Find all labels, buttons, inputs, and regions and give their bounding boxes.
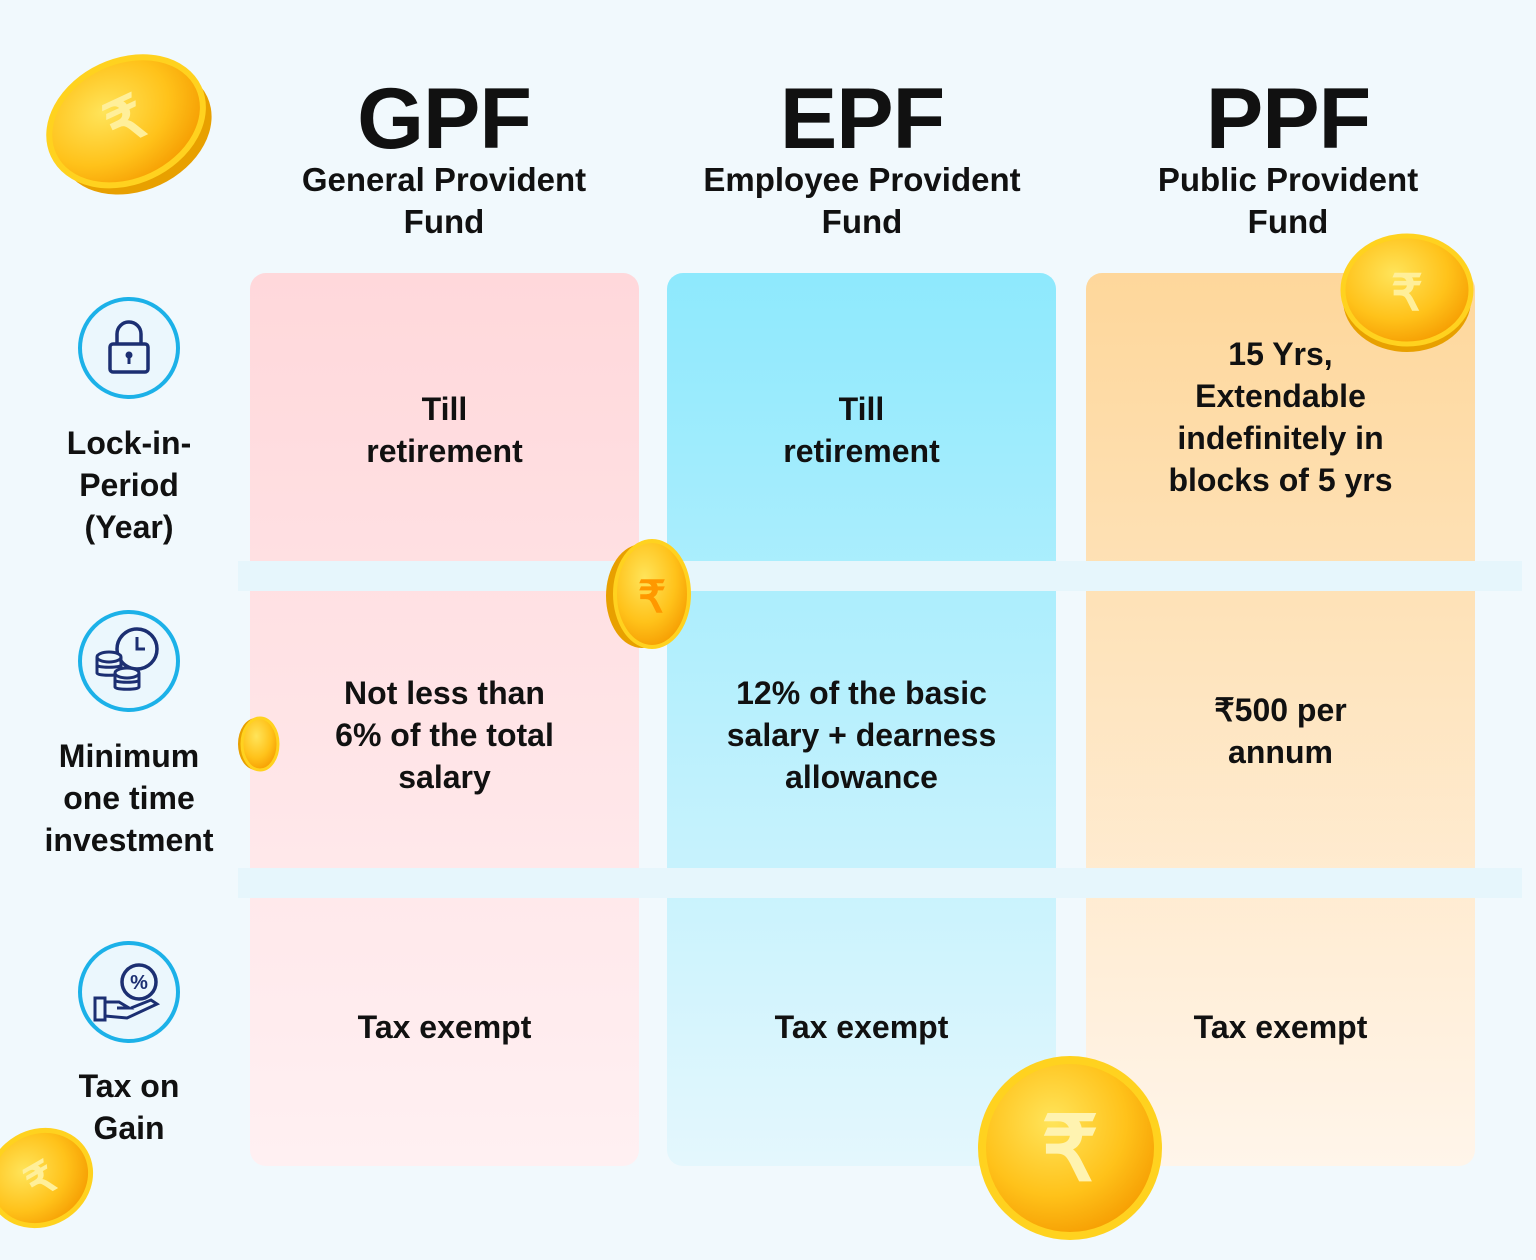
label: tax on gain: Gain bbox=[93, 1110, 165, 1146]
cell: PPF lock-in: 15 Yrs, bbox=[1228, 336, 1333, 372]
cell: PPF lock-in: indefinitely in bbox=[1177, 420, 1384, 456]
heading: PPF bbox=[1158, 71, 1418, 240]
cell: EPF minimum bbox=[727, 675, 996, 795]
cell: EPF lock-in: retirement bbox=[783, 433, 940, 469]
coin: PPF corner: ₹ bbox=[1391, 265, 1423, 321]
cell: PPF lock-in: Extendable bbox=[1195, 378, 1366, 414]
coin: PPF corner bbox=[1343, 236, 1471, 352]
coin: small left bbox=[238, 718, 278, 770]
heading: GPF: GPF bbox=[357, 71, 531, 167]
cell: GPF minimum bbox=[335, 675, 554, 795]
label: lock-in period bbox=[67, 425, 191, 545]
cell: GPF lock-in bbox=[366, 391, 523, 469]
heading: EPF: Fund bbox=[822, 203, 902, 240]
label: lock-in period: Period bbox=[79, 467, 179, 503]
cell: GPF lock-in: retirement bbox=[366, 433, 523, 469]
panel: GPF card background bbox=[250, 273, 639, 1166]
cell: EPF tax: Tax exempt bbox=[775, 1009, 948, 1045]
cell: GPF minimum: salary bbox=[398, 759, 491, 795]
coin: middle: ₹ bbox=[638, 573, 666, 622]
icon: hand with percent: % bbox=[130, 972, 148, 994]
cell: EPF lock-in bbox=[783, 391, 940, 469]
cell: PPF minimum: ₹500 per bbox=[1214, 692, 1347, 728]
label: minimum investment: investment bbox=[45, 822, 213, 858]
cell: PPF lock-in: blocks of 5 yrs bbox=[1168, 462, 1393, 498]
cell: EPF minimum: allowance bbox=[785, 759, 938, 795]
heading: GPF: Fund bbox=[404, 203, 484, 240]
coin: top-left bbox=[28, 31, 233, 220]
cell: PPF lock-in bbox=[1168, 336, 1393, 498]
heading: EPF bbox=[703, 71, 1021, 240]
cell: PPF tax: Tax exempt bbox=[1194, 1009, 1367, 1045]
heading: EPF: EPF bbox=[780, 71, 944, 167]
label: lock-in period: (Year) bbox=[85, 509, 173, 545]
cell: GPF lock-in: Till bbox=[422, 391, 467, 427]
label: tax on gain bbox=[79, 1068, 179, 1146]
label: minimum investment: one time bbox=[63, 780, 195, 816]
divider band 2 bbox=[238, 868, 1522, 898]
divider band 1 bbox=[238, 561, 1522, 591]
icon: hand with percent bbox=[78, 941, 180, 1043]
heading: PPF: Fund bbox=[1248, 203, 1328, 240]
cell: GPF minimum: Not less than bbox=[344, 675, 545, 711]
coin: large bottom: ₹ bbox=[1041, 1100, 1099, 1200]
heading: PPF: Public Provident bbox=[1158, 161, 1418, 198]
panel: PPF card background bbox=[1086, 273, 1475, 1166]
coin: middle bbox=[606, 541, 689, 648]
label: tax on gain: Tax on bbox=[79, 1068, 179, 1104]
heading: PPF: PPF bbox=[1206, 71, 1370, 167]
cell: EPF minimum: salary + dearness bbox=[727, 717, 996, 753]
panel: EPF card background bbox=[667, 273, 1056, 1166]
icon: coins and clock bbox=[78, 610, 180, 712]
heading: GPF: General Provident bbox=[302, 161, 586, 198]
coin: top-left: ₹ bbox=[94, 82, 157, 159]
coin: bottom-left: ₹ bbox=[17, 1152, 66, 1208]
cell: GPF tax: Tax exempt bbox=[358, 1009, 531, 1045]
cell: GPF minimum: 6% of the total bbox=[335, 717, 554, 753]
coin: large bottom bbox=[982, 1060, 1158, 1236]
cell: PPF minimum: annum bbox=[1228, 734, 1333, 770]
label: minimum investment bbox=[45, 738, 214, 858]
cell: PPF minimum bbox=[1214, 692, 1347, 770]
coin: bottom-left bbox=[0, 1112, 108, 1244]
cell: EPF minimum: 12% of the basic bbox=[736, 675, 987, 711]
heading: GPF bbox=[302, 71, 586, 240]
icon: lock bbox=[78, 297, 180, 399]
label: lock-in period: Lock-in- bbox=[67, 425, 191, 461]
label: minimum investment: Minimum bbox=[59, 738, 199, 774]
heading: EPF: Employee Provident bbox=[703, 161, 1021, 198]
cell: EPF lock-in: Till bbox=[839, 391, 884, 427]
